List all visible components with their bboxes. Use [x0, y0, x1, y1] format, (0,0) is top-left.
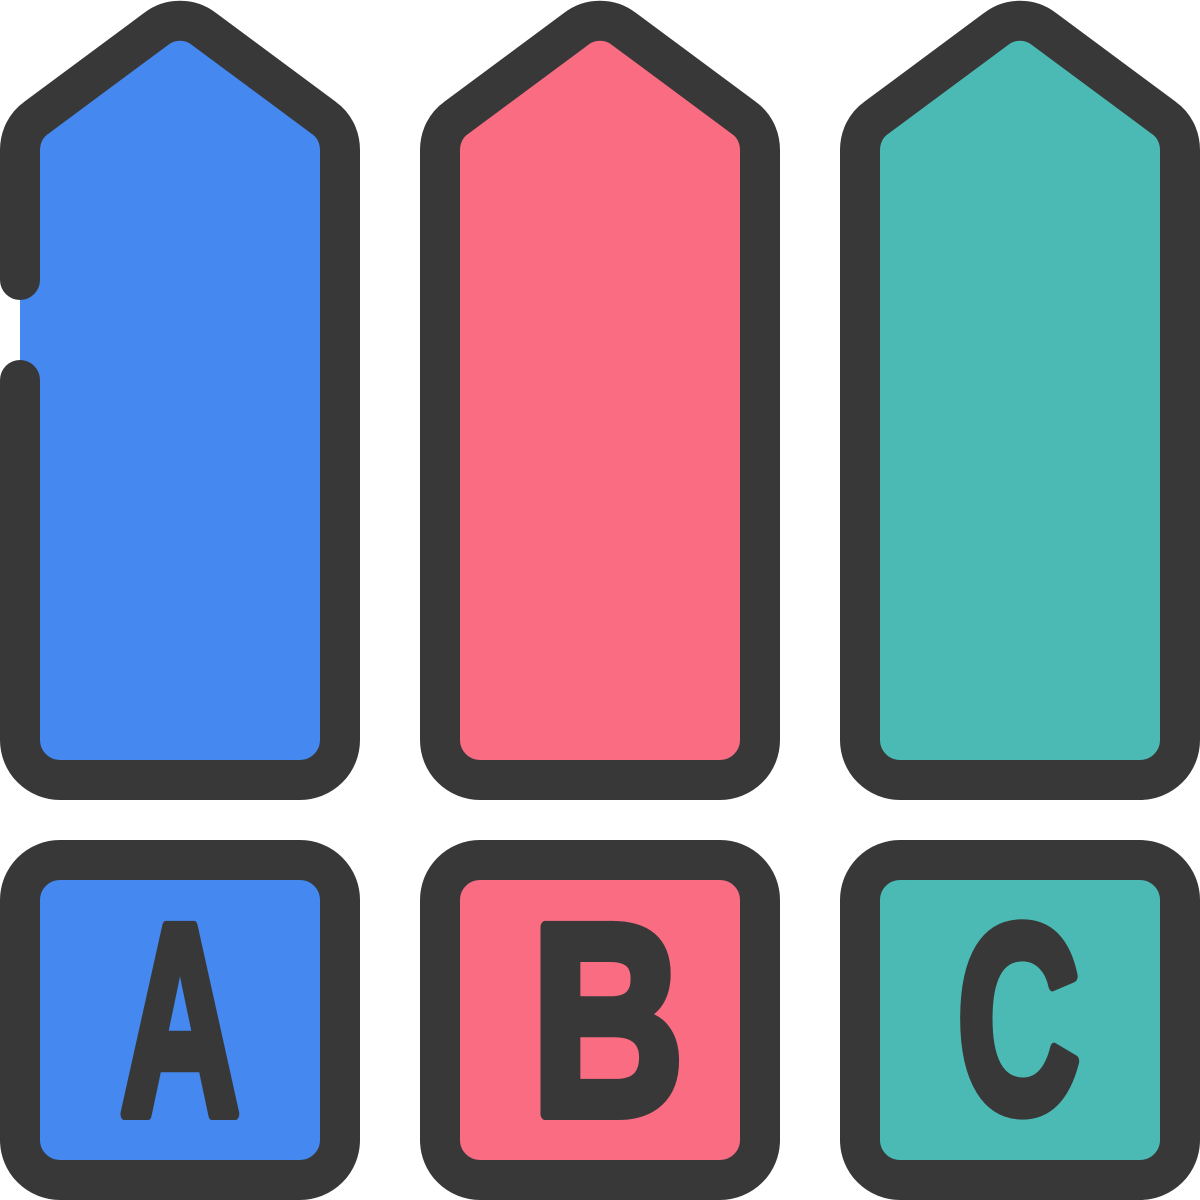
- letter A: A: [120, 868, 240, 1172]
- arrow B: pink: [440, 21, 760, 780]
- arrow C: teal: [860, 21, 1180, 780]
- arrow A: blue: [20, 21, 340, 780]
- tile A: blue: [20, 860, 340, 1180]
- letter B: B: [531, 868, 684, 1172]
- tile C: teal: [860, 860, 1180, 1180]
- letter C: C: [957, 871, 1080, 1168]
- tile B: pink: [440, 860, 760, 1180]
